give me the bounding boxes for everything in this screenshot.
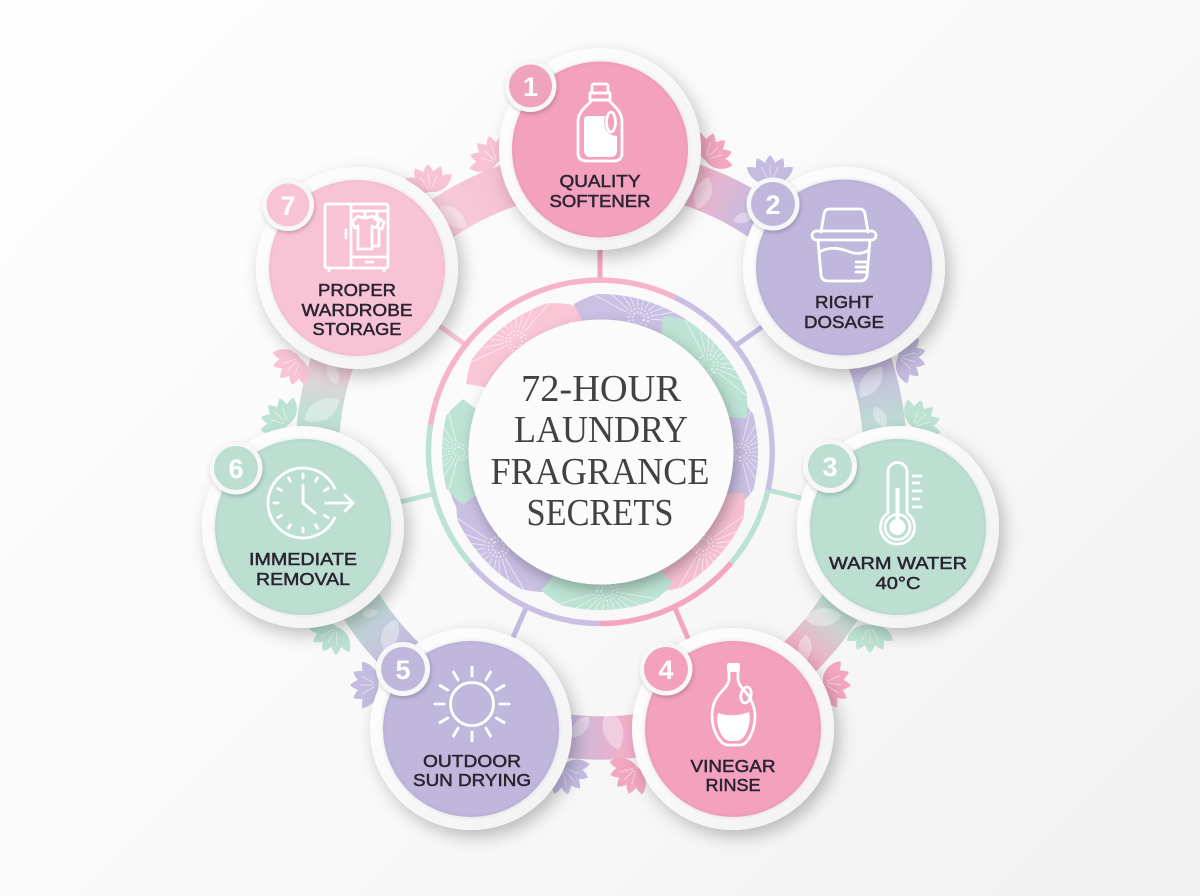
label: OUTDOOR: [423, 751, 521, 771]
node 1: quality softener: [499, 48, 701, 250]
badge 7: [262, 179, 314, 231]
icon: vinegar bottle: [712, 663, 755, 745]
icon: thermometer: [880, 462, 921, 544]
node 2: right dosage: [743, 167, 945, 369]
label: RINSE: [706, 775, 760, 795]
title: SECRETS: [526, 492, 674, 534]
node 6: immediate removal: [202, 426, 404, 628]
badge 1: 1: [523, 72, 538, 102]
label: [550, 171, 650, 211]
label: [690, 756, 776, 795]
outer ring band: [295, 148, 907, 760]
badge 2: 2: [765, 190, 781, 220]
icon: wardrobe: [325, 204, 388, 271]
hub: title disc: [468, 320, 734, 584]
badge 3: [803, 439, 857, 493]
title: LAUNDRY: [514, 409, 688, 451]
hub: segmented ring: [429, 280, 772, 624]
icon: dosage cup: [812, 209, 876, 281]
badge 3: 3: [822, 452, 838, 482]
label: WARM WATER: [829, 553, 967, 573]
band flower sprigs: [249, 121, 952, 806]
label: IMMEDIATE: [249, 549, 357, 569]
badge 7: 7: [280, 191, 296, 221]
badge 4: 4: [658, 655, 674, 685]
hub: flowers around title disc: [442, 294, 758, 610]
label: [804, 292, 884, 332]
label: SUN DRYING: [413, 770, 531, 790]
label: REMOVAL: [256, 569, 350, 589]
icon: sun: [435, 667, 509, 741]
label: DOSAGE: [804, 312, 884, 332]
node 3: warm water: [797, 426, 999, 628]
badge 6: [210, 442, 262, 494]
label: PROPER: [318, 280, 396, 300]
badge 2: [746, 178, 800, 230]
title: 72-HOUR: [521, 368, 682, 410]
node 4: vinegar rinse: [632, 628, 834, 830]
label: [249, 549, 357, 589]
badge 6: 6: [228, 454, 244, 484]
spokes connecting hub to nodes: [350, 200, 850, 690]
title: [490, 368, 710, 534]
infographic stage: [199, 47, 1012, 845]
node 5: outdoor sun drying: [370, 628, 572, 830]
label: WARDROBE: [302, 300, 412, 320]
band leaves: [299, 174, 891, 752]
icon: softener bottle: [578, 84, 622, 161]
diagram: [199, 47, 1012, 845]
title: FRAGRANCE: [490, 451, 710, 493]
label: 40°C: [876, 573, 920, 593]
label: [413, 751, 531, 790]
badge 4: [640, 642, 692, 696]
badge 5: 5: [395, 655, 411, 685]
label: RIGHT: [815, 292, 873, 312]
label: [302, 280, 412, 339]
badge 5: [376, 642, 430, 696]
label: [829, 553, 967, 593]
icon: clock with arrow: [268, 468, 353, 538]
label: SOFTENER: [550, 191, 650, 211]
label: VINEGAR: [690, 756, 776, 776]
label: QUALITY: [560, 171, 641, 191]
label: STORAGE: [312, 319, 402, 339]
node 7: proper wardrobe storage: [256, 167, 458, 369]
badge 1: [504, 60, 556, 112]
